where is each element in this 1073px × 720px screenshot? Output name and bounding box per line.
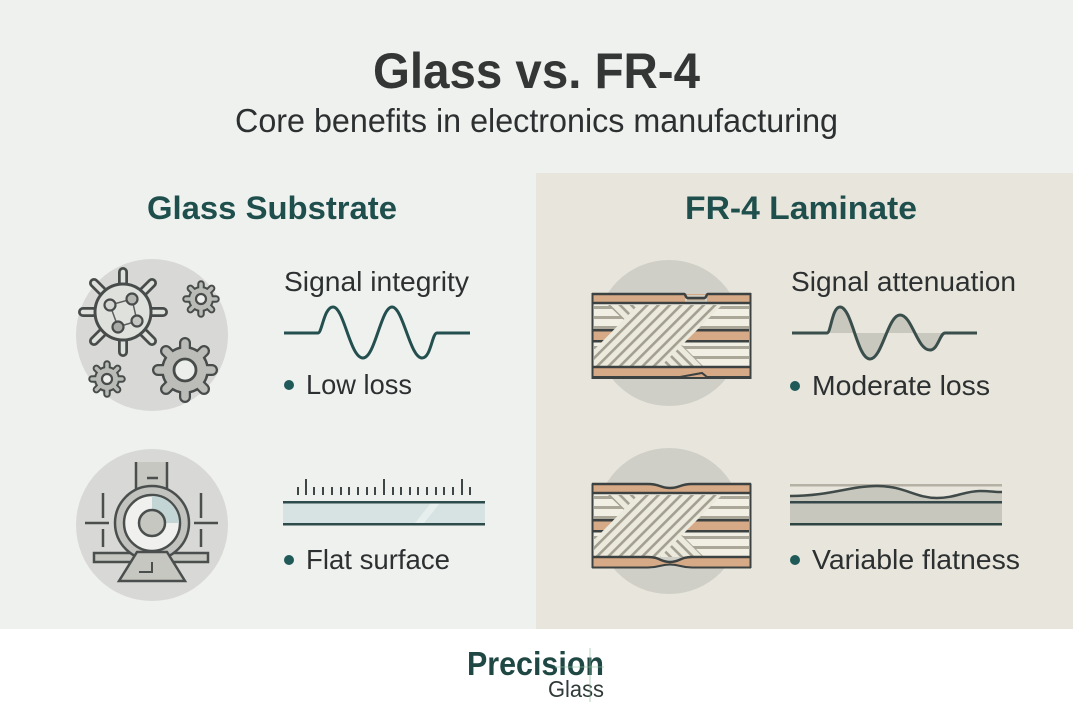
icon: FR-4 cross-section warped [592,448,751,594]
small gear bottom left [92,364,122,394]
logo: Precision Glass: Glass [548,676,604,702]
small gear top right [186,284,216,314]
subtitle: Core benefits in electronics manufacturing [235,102,838,139]
text: flat surface: Flat surface [306,544,450,575]
panel: FR-4 background [536,173,1073,629]
bullet [284,555,294,565]
text: signal attenuation: Signal attenuation [791,266,1016,297]
bullet [284,380,294,390]
icon: FR-4 cross-section with notch [592,260,751,406]
large gear bottom right [158,343,212,397]
title: Glass vs. FR-4 [373,43,700,99]
chart: clean signal wave [284,307,470,358]
bullet [790,381,800,391]
logo: Precision Glass [467,645,604,702]
logo: Precision Glass: Precision [467,645,604,682]
chart: ruler and flat surface [283,479,485,526]
text: signal integrity: Signal integrity [284,266,469,297]
footer band [0,629,1073,720]
heading: Glass Substrate: Glass Substrate [147,190,397,226]
heading: FR-4 Laminate: FR-4 Laminate [685,190,917,226]
icon: gears and network [76,259,228,411]
text: moderate loss: Moderate loss [812,370,990,401]
text: variable flatness: Variable flatness [812,544,1020,575]
chart: wavy surface profile [790,484,1002,526]
text: low loss: Low loss [306,369,412,400]
chart: attenuated signal wave [792,307,977,359]
bullet [790,555,800,565]
icon: wafer inspection machine [76,449,228,601]
large spiked gear [83,272,163,352]
